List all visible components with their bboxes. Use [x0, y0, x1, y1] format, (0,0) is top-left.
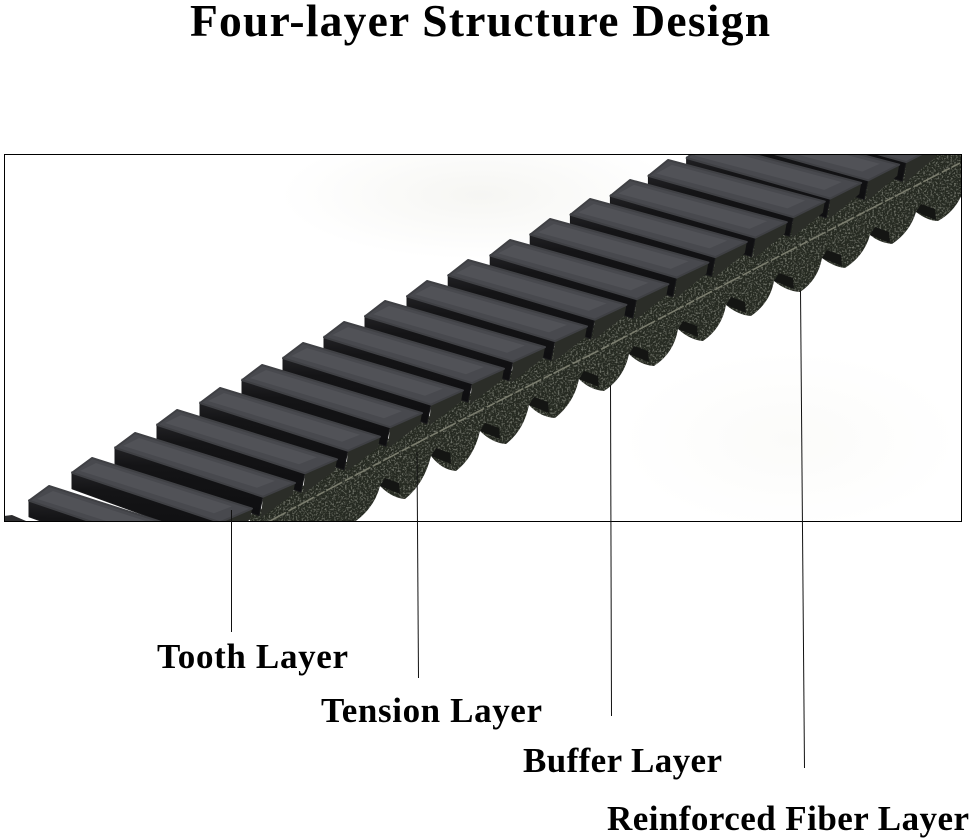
dark tooth recesses — [380, 204, 936, 494]
leader line: reinforced fiber layer — [800, 291, 804, 768]
teeth — [5, 155, 936, 521]
photo background — [415, 174, 546, 216]
panel: belt photograph — [4, 154, 962, 522]
leader line: buffer layer — [610, 385, 612, 716]
reinforced fiber line — [270, 163, 960, 521]
belt body: buffer, tension and reinforced fiber layers — [250, 140, 965, 525]
leader line: tooth layer — [230, 510, 232, 632]
label: buffer layer: Buffer Layer — [523, 741, 722, 780]
photo frame — [4, 154, 962, 522]
label: reinforced fiber layer: Reinforced Fiber Layer — [607, 799, 969, 838]
label: tooth layer: Tooth Layer — [157, 637, 348, 676]
label: tension layer: Tension Layer — [321, 691, 542, 730]
leader line: tension layer — [417, 452, 418, 678]
